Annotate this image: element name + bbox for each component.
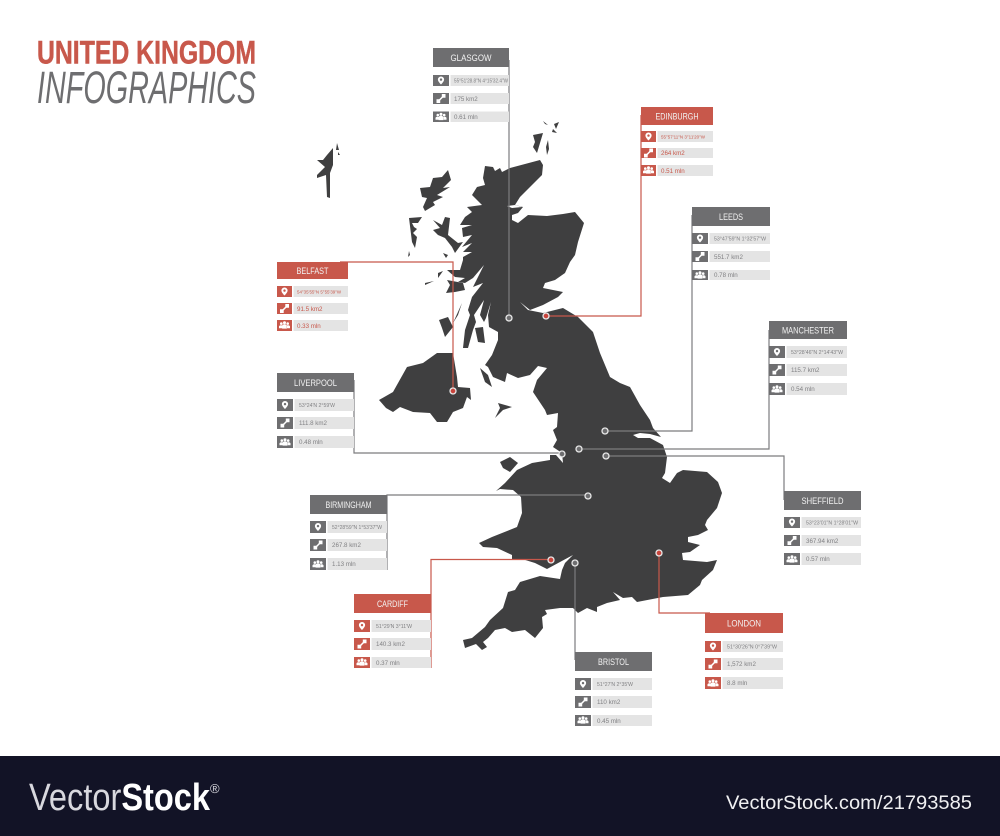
panel: Birmingham: 52°28'59"N 1°53'37"W bbox=[332, 525, 382, 531]
panel: Cardiff: 0.37 mln bbox=[376, 660, 400, 667]
panel: Edinburgh: 264 km2 bbox=[661, 150, 685, 157]
panel: London: LONDON bbox=[727, 618, 761, 628]
panel: Liverpool: 53°24'N 2°59'W bbox=[299, 403, 335, 409]
Isle of Man bbox=[495, 403, 512, 418]
Great Britain mainland bbox=[447, 160, 722, 650]
panel: Leeds: 551.7 km2 bbox=[714, 254, 743, 261]
panel: Birmingham: 1.13 mln bbox=[332, 561, 356, 568]
Northern Ireland bbox=[379, 353, 471, 422]
panel: Sheffield: 53°23'01"N 1°28'01"W bbox=[806, 520, 858, 526]
image reference: VectorStock.com/21793585 bbox=[726, 793, 972, 814]
panel: Leeds: 0.78 mln bbox=[714, 272, 738, 279]
title: UNITED KINGDOM bbox=[37, 34, 256, 70]
Anglesey bbox=[500, 457, 518, 472]
panel: Belfast bbox=[277, 262, 348, 331]
panel: Leeds: LEEDS bbox=[719, 212, 743, 222]
panel: Manchester: 115.7 km2 bbox=[791, 367, 820, 374]
panel: Bristol: 0.45 mln bbox=[597, 718, 621, 725]
Lewis and Harris bbox=[420, 170, 451, 211]
panel: Glasgow: 55°51'28.8"N 4°15'32.4"W bbox=[454, 78, 508, 84]
panel: Edinburgh: 0.51 mln bbox=[661, 168, 685, 175]
panel: Belfast: 91.5 km2 bbox=[297, 306, 323, 313]
small western isles bbox=[408, 251, 448, 285]
panel: Glasgow bbox=[433, 48, 509, 122]
Shetland bbox=[317, 143, 340, 198]
panel: Bristol bbox=[575, 652, 652, 726]
panel: Birmingham: BIRMINGHAM bbox=[326, 500, 372, 510]
panel: Cardiff: CARDIFF bbox=[377, 599, 408, 609]
panel: Manchester bbox=[769, 321, 847, 395]
panel: Cardiff: 140.3 km2 bbox=[376, 641, 405, 648]
panel: Manchester: 53°28'46"N 2°14'43"W bbox=[791, 350, 843, 356]
connector lines bbox=[340, 60, 784, 668]
panel: Belfast: 0.33 mln bbox=[297, 323, 321, 330]
panel: London bbox=[705, 613, 783, 689]
panel: Birmingham: 267.8 km2 bbox=[332, 542, 361, 549]
panel: Edinburgh: EDINBURGH bbox=[656, 112, 698, 122]
panel: Leeds bbox=[692, 207, 770, 280]
location dots bbox=[450, 313, 662, 566]
panel: Glasgow: 0.61 mln bbox=[454, 114, 478, 121]
panel: Bristol: 110 km2 bbox=[597, 699, 621, 706]
title: INFOGRAPHICS bbox=[37, 62, 256, 113]
panel: Manchester: 0.54 mln bbox=[791, 386, 815, 393]
panel: Edinburgh bbox=[641, 107, 713, 176]
panel: Sheffield: SHEFFIELD bbox=[802, 496, 844, 506]
panel: Belfast: BELFAST bbox=[296, 266, 329, 276]
footer banner bbox=[0, 756, 1000, 836]
panel: Cardiff: 51°29'N 3°11'W bbox=[376, 624, 412, 630]
Mull bbox=[439, 317, 453, 337]
panel: Glasgow: 175 km2 bbox=[454, 96, 478, 103]
VectorStock logo: VectorStock bbox=[29, 777, 211, 819]
panel: Liverpool bbox=[277, 373, 354, 448]
panel: Liverpool: 0.48 mln bbox=[299, 439, 323, 446]
map of the United Kingdom bbox=[317, 121, 722, 650]
panel: Liverpool: LIVERPOOL bbox=[294, 378, 337, 388]
Lismore and Firth isles bbox=[446, 280, 465, 293]
panel: Sheffield: 0.57 mln bbox=[806, 556, 830, 563]
panel: Belfast: 54°35'55"N 5°55'39"W bbox=[297, 290, 342, 294]
panel: Liverpool: 111.8 km2 bbox=[299, 420, 328, 427]
panel: Sheffield: 367.94 km2 bbox=[806, 538, 839, 545]
panel: London: 8.8 mln bbox=[727, 680, 748, 687]
Uists bbox=[409, 217, 422, 248]
Skye bbox=[433, 217, 463, 253]
panel: London: 1,572 km2 bbox=[727, 661, 756, 668]
firth sliver bbox=[507, 205, 522, 208]
panel: Birmingham bbox=[310, 495, 387, 570]
Jura bbox=[453, 303, 462, 323]
panel: Edinburgh: 55°57'11"N 3°11'20"W bbox=[661, 134, 706, 140]
Ailsa and Galloway isle bbox=[480, 368, 492, 387]
panel: Leeds: 53°47'59"N 1°32'57"W bbox=[714, 236, 766, 242]
panel: London: 51°30'26"N 0°7'39"W bbox=[727, 644, 777, 650]
title bbox=[37, 34, 256, 113]
panel: Bristol: 51°27'N 2°35'W bbox=[597, 682, 633, 688]
Arran bbox=[475, 327, 485, 343]
panel: Glasgow: GLASGOW bbox=[450, 53, 492, 63]
panel: Bristol: BRISTOL bbox=[598, 657, 629, 667]
panel: Sheffield bbox=[784, 491, 861, 565]
panel: Cardiff bbox=[354, 594, 431, 668]
footer banner: ® bbox=[210, 781, 220, 796]
Orkney bbox=[533, 121, 559, 155]
panel: Manchester: MANCHESTER bbox=[782, 326, 834, 336]
